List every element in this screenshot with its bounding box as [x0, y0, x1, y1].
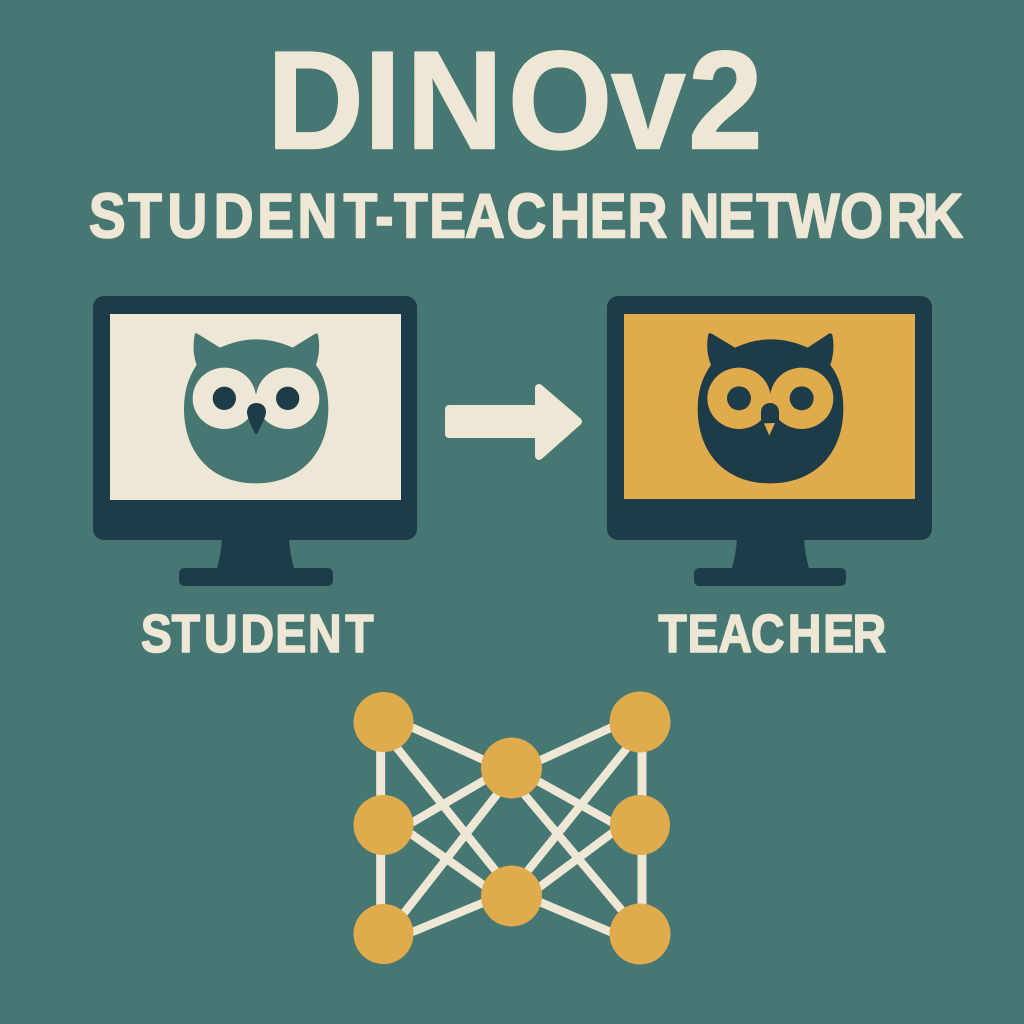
title: DINOv2	[267, 23, 763, 179]
monitor screen	[624, 314, 915, 499]
icon: student owl	[184, 333, 328, 483]
subtitle: STUDENT-TEACHER NETWORK	[89, 180, 963, 251]
icon: teacher owl	[698, 333, 843, 483]
panel: student monitor	[93, 296, 417, 586]
monitor frame	[607, 296, 932, 540]
network nodes	[354, 692, 670, 964]
network edges	[381, 722, 642, 934]
monitor stand	[179, 538, 333, 586]
monitor stand	[694, 538, 846, 586]
monitor screen	[110, 314, 401, 500]
panel: teacher monitor	[607, 296, 932, 586]
network diagram	[354, 692, 670, 964]
teacher label: TEACHER	[658, 603, 886, 664]
arrow	[449, 388, 578, 456]
student label: STUDENT	[141, 603, 374, 664]
monitor frame	[93, 296, 417, 540]
